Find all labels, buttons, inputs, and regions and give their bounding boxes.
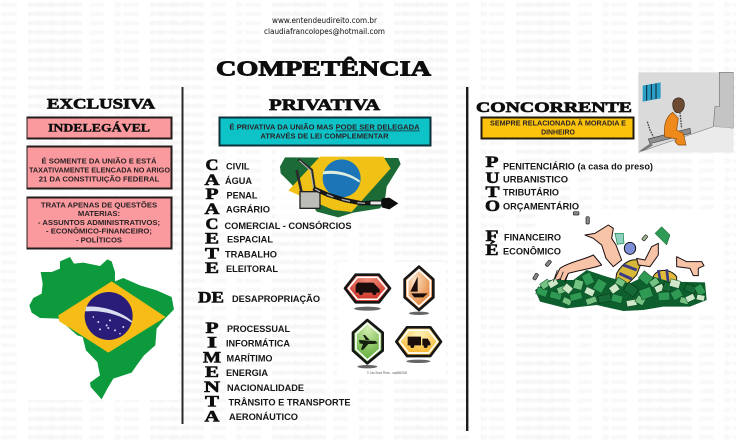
box: questões materiais: - ASSUNTOS ADMINISTRATIVOS; (38, 218, 160, 227)
source credits (264, 16, 385, 36)
box: questões materiais: TRATA APENAS DE QUESTÕES (41, 200, 157, 210)
acronym: PIMENTA: E (205, 364, 219, 381)
heading: exclusiva: EXCLUSIVA (47, 97, 155, 113)
title: COMPETÊNCIA (216, 56, 432, 80)
source credits: claudiafrancolopes@hotmail.com (264, 27, 385, 36)
box: indelegável (26, 118, 172, 138)
acronym: PUTO: TRIBUTÁRIO (503, 186, 559, 198)
acronym: FÉ: F (486, 228, 499, 245)
acronym: PIMENTA: P (206, 320, 219, 337)
icons: transport signs: © Can Stock Photo - csp8652345 (367, 371, 407, 375)
icon: van (345, 275, 390, 311)
acronym: CAPACETE: TRABALHO (225, 248, 277, 260)
panel: concorrente (476, 72, 733, 311)
acronym: CAPACETE: CIVIL (226, 160, 250, 172)
callout: delegação: É PRIVATIVA DA UNIÃO MAS PODE SER DELEGADA (229, 122, 420, 132)
acronym: PIMENTA: AERONÁUTICO (229, 411, 298, 422)
box: definição (26, 146, 172, 188)
acronym: PIMENTA: T (205, 394, 219, 410)
acronym: FÉ: É (486, 240, 498, 259)
acronym: CAPACETE: A (204, 172, 220, 189)
acronym: PIMENTA: INFORMÁTICA (226, 338, 290, 348)
acronym: FÉ (486, 228, 561, 259)
icon: plane (353, 320, 383, 368)
callout: delegação (220, 118, 430, 146)
heading: concorrente: CONCORRENTE (476, 100, 632, 116)
acronym: CAPACETE: T (205, 246, 219, 262)
heading: privativa: PRIVATIVA (269, 97, 381, 114)
image: man swimming in money (533, 212, 707, 311)
acronym: PIMENTA: TRÂNSITO E TRANSPORTE (228, 396, 350, 408)
acronym: PIMENTA (203, 320, 350, 426)
acronym: PIMENTA: I (207, 334, 217, 352)
image: prisoner in cell (638, 72, 733, 152)
acronym: PIMENTA: NACIONALIDADE (227, 382, 304, 393)
callout: moradia e dinheiro: SEMPRE RELACIONADA À MORADIA E (490, 118, 626, 128)
box: questões materiais: MATERIAS: (78, 209, 120, 218)
acronym: FÉ: ECONÔMICO (503, 246, 561, 256)
callout: delegação: ATRAVÉS DE LEI COMPLEMENTAR (260, 132, 389, 141)
icon: boat (405, 267, 433, 315)
callout: moradia e dinheiro: DINHEIRO (541, 130, 575, 136)
source credits: www.entendeudireito.com.br (272, 16, 378, 25)
acronym: CAPACETE: P (206, 186, 219, 203)
acronym: PUTO: ORÇAMENTÁRIO (503, 200, 579, 212)
acronym: CAPACETE (204, 157, 352, 277)
acronym: CAPACETE: C (206, 216, 218, 233)
box: questões materiais (26, 198, 172, 248)
acronym: PIMENTA: N (204, 379, 221, 396)
icon: truck (396, 327, 441, 363)
box: questões materiais: - ECONÔMICO-FINANCEIRO; (46, 227, 152, 236)
acronym: CAPACETE: ÁGUA (225, 175, 252, 186)
box: indelegável: INDELEGÁVEL (48, 120, 150, 134)
acronym: PUTO: O (485, 198, 500, 215)
acronym: CAPACETE: ESPACIAL (227, 234, 273, 244)
acronym: DE: DE (198, 290, 224, 306)
box: questões materiais: - POLÍTICOS (76, 236, 122, 244)
acronym: FÉ: FINANCEIRO (504, 232, 561, 242)
acronym: CAPACETE: A (204, 201, 220, 218)
acronym: CAPACETE: PENAL (226, 190, 258, 200)
map of Brazil with flag (29, 257, 174, 399)
image: padlocked Brazil flag map (280, 157, 401, 217)
acronym: PIMENTA: M (203, 350, 221, 366)
panel: exclusiva (26, 97, 174, 399)
panel: privativa (198, 97, 441, 426)
box: definição: É SOMENTE DA UNIÃO E ESTÁ (41, 156, 157, 166)
acronym: PIMENTA: PROCESSUAL (227, 323, 290, 334)
acronym: CAPACETE: E (205, 230, 219, 248)
callout: moradia e dinheiro (482, 118, 634, 138)
acronym: CAPACETE: C (206, 157, 218, 174)
acronym: PUTO: P (486, 154, 499, 171)
icons: transport signs (345, 267, 441, 375)
acronym: PUTO: URBANISTICO (503, 174, 568, 184)
acronym: PIMENTA: ENERGIA (226, 367, 268, 378)
acronym: CAPACETE: E (205, 260, 219, 277)
acronym: CAPACETE: COMERCIAL - CONSÓRCIOS (224, 220, 352, 231)
acronym: PIMENTA: MARÍTIMO (226, 352, 272, 364)
acronym: PIMENTA: A (204, 408, 220, 426)
acronym: PUTO (485, 154, 653, 215)
acronym: PUTO: T (486, 184, 500, 201)
box: definição: TAXATIVAMENTE ELENCADA NO ARIGO (29, 166, 170, 174)
box: definição: 21 DA CONSTITUIÇÃO FEDERAL (39, 174, 160, 184)
acronym: PUTO: PENITENCIÁRIO (a casa do preso) (503, 160, 653, 172)
acronym: DE: DESAPROPRIAÇÃO (232, 293, 320, 304)
acronym: CAPACETE: AGRÁRIO (226, 204, 270, 214)
acronym: CAPACETE: ELEITORAL (226, 263, 278, 274)
acronym: DE (198, 290, 320, 306)
acronym: PUTO: U (486, 170, 500, 187)
